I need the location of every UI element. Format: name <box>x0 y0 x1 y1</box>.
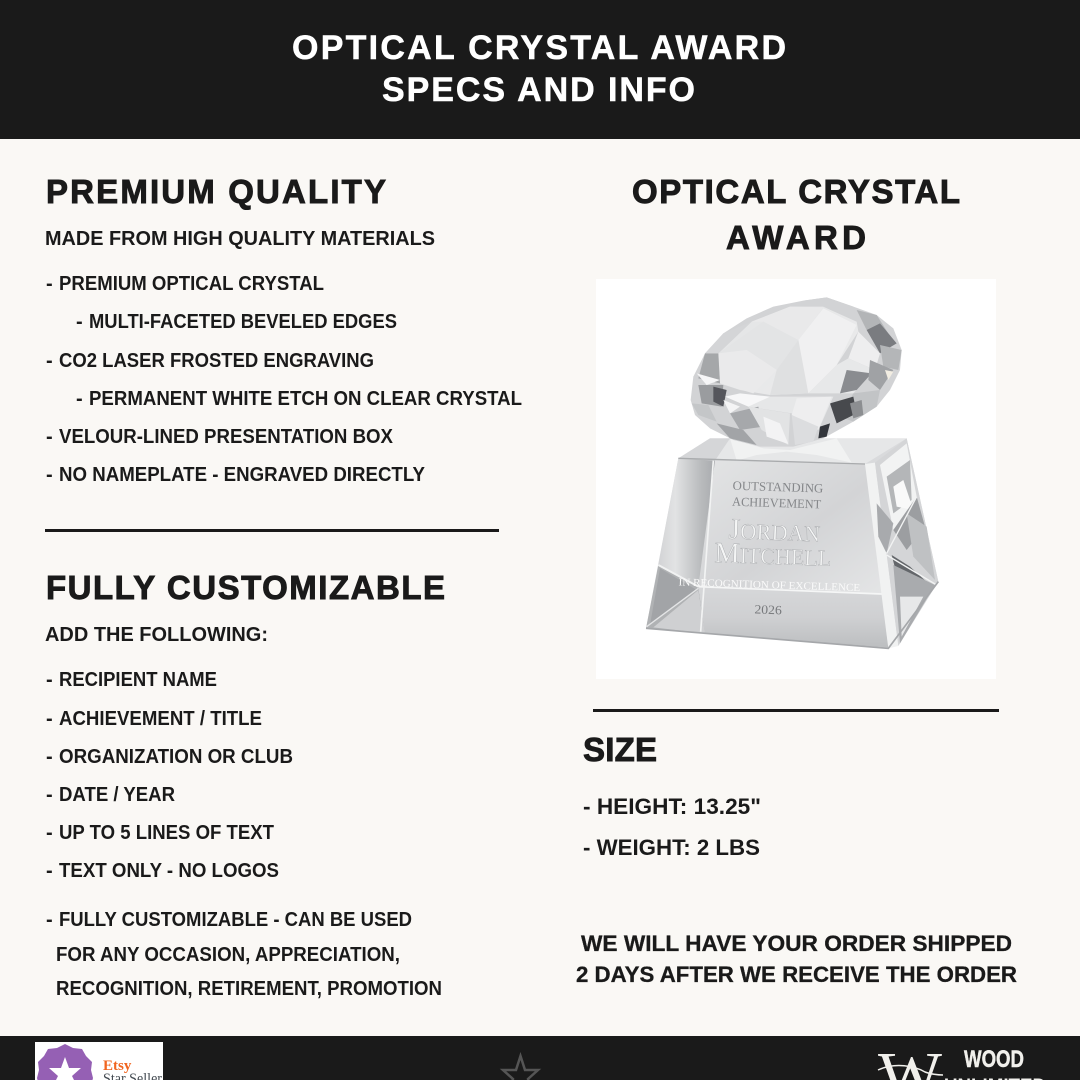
materials text block: - <box>76 311 83 333</box>
icon: purple rosette <box>37 1044 93 1080</box>
heading: product name <box>632 173 960 256</box>
materials text block: NO NAMEPLATE - ENGRAVED DIRECTLY <box>59 464 426 486</box>
crystal base <box>646 438 938 648</box>
engraved text: ACHIEVEMENT <box>732 495 822 511</box>
footer bar <box>0 1036 1080 1080</box>
panel: size <box>583 731 761 860</box>
title: OPTICAL CRYSTAL AWARD <box>292 29 786 67</box>
customization text block: - <box>46 746 53 768</box>
occasions note: FOR ANY OCCASION, APPRECIATION, <box>56 944 400 966</box>
engraved text: 2026 <box>754 602 782 617</box>
engraved text: OUTSTANDING <box>732 479 824 496</box>
materials text block: - <box>76 388 83 410</box>
etsy label: Etsy <box>103 1058 132 1074</box>
heading: size: SIZE <box>583 731 657 768</box>
product photo: crystal award <box>596 279 996 679</box>
shipping note: 2 DAYS AFTER WE RECEIVE THE ORDER <box>576 962 1017 987</box>
customization text block: - <box>46 669 53 691</box>
occasions note <box>46 909 442 1000</box>
crystal diamond <box>691 297 902 447</box>
customization text block: UP TO 5 LINES OF TEXT <box>59 822 274 844</box>
materials text block: - <box>46 273 53 295</box>
logo swoosh <box>878 1066 943 1075</box>
engraved text: IN RECOGNITION OF EXCELLENCE <box>678 577 860 594</box>
heading: fully customizable: FULLY CUSTOMIZABLE <box>46 569 445 606</box>
wood unlimited logo <box>878 1039 1046 1080</box>
materials text block: CO2 LASER FROSTED ENGRAVING <box>59 350 374 372</box>
customization text block <box>45 624 293 882</box>
heading: product name: OPTICAL CRYSTAL <box>632 173 960 210</box>
engraved text: MITCHELL <box>714 537 832 573</box>
materials text block: PREMIUM OPTICAL CRYSTAL <box>59 273 324 295</box>
weight spec: - WEIGHT: 2 LBS <box>583 835 760 860</box>
shipping note: WE WILL HAVE YOUR ORDER SHIPPED <box>581 931 1012 956</box>
panel: premium quality <box>45 173 522 486</box>
materials text block: PERMANENT WHITE ETCH ON CLEAR CRYSTAL <box>89 388 522 410</box>
customization text block: - <box>46 860 53 882</box>
customization text block: ADD THE FOLLOWING: <box>45 624 268 646</box>
shipping note <box>576 931 1017 987</box>
panel: fully customizable <box>45 569 445 1000</box>
height spec: - HEIGHT: 13.25" <box>583 794 761 819</box>
customization text block: - <box>46 708 53 730</box>
header banner <box>0 0 1080 139</box>
occasions note: FULLY CUSTOMIZABLE - CAN BE USED <box>59 909 412 931</box>
materials text block: MULTI-FACETED BEVELED EDGES <box>89 311 397 333</box>
logo wordmark: WOOD <box>964 1046 1024 1073</box>
materials text block: - <box>46 350 53 372</box>
customization text block: - <box>46 784 53 806</box>
customization text block: TEXT ONLY - NO LOGOS <box>59 860 279 882</box>
occasions note: RECOGNITION, RETIREMENT, PROMOTION <box>56 978 442 1000</box>
materials text block: - <box>46 464 53 486</box>
customization text block: ACHIEVEMENT / TITLE <box>59 708 262 730</box>
engraved text: JORDAN <box>728 513 821 548</box>
heading: product name: AWARD <box>726 219 866 256</box>
materials text block <box>45 228 522 486</box>
materials text block: MADE FROM HIGH QUALITY MATERIALS <box>45 228 435 250</box>
materials text block: VELOUR-LINED PRESENTATION BOX <box>59 426 394 448</box>
customization text block: ORGANIZATION OR CLUB <box>59 746 293 768</box>
icon: star outline <box>503 1056 538 1080</box>
engraved text <box>678 477 864 620</box>
heading: premium quality: PREMIUM QUALITY <box>46 173 386 210</box>
title: SPECS AND INFO <box>382 71 695 109</box>
etsy star seller badge <box>35 1042 163 1080</box>
customization text block: RECIPIENT NAME <box>59 669 217 691</box>
customization text block: DATE / YEAR <box>59 784 176 806</box>
customization text block: - <box>46 822 53 844</box>
occasions note: - <box>46 909 53 931</box>
title <box>292 29 786 109</box>
materials text block: - <box>46 426 53 448</box>
